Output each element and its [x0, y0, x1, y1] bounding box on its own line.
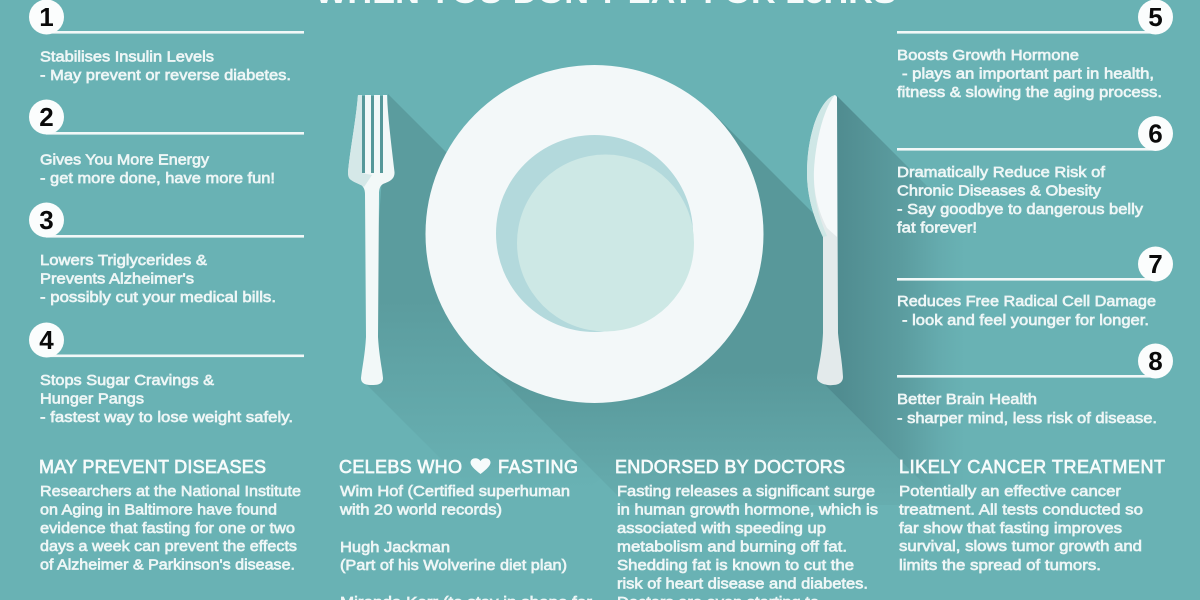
panel: celebs who love fasting: Wim Hof (Certified superhuman	[340, 483, 570, 500]
panel: likely cancer treatment: far show that fasting improves	[899, 520, 1122, 537]
panel: endorsed by doctors: ENDORSED BY DOCTORS	[615, 457, 845, 477]
benefit 2: 2	[39, 102, 54, 132]
panel: likely cancer treatment: treatment. All tests conducted so	[899, 502, 1143, 518]
benefit 7: - look and feel younger for longer.	[902, 312, 1149, 329]
panel: endorsed by doctors: metabolism and burning off fat.	[617, 538, 847, 556]
panel: celebs who love fasting	[339, 457, 592, 600]
icon: plate	[426, 65, 764, 403]
benefit 1	[29, 0, 304, 84]
panel: may prevent diseases: of Alzheimer & Parkinson's disease.	[40, 556, 295, 574]
benefit 4: Hunger Pangs	[40, 390, 144, 408]
icon: knife	[807, 95, 843, 385]
benefit 6: - Say goodbye to dangerous belly	[897, 201, 1144, 218]
panel: likely cancer treatment	[899, 457, 1165, 574]
panel: endorsed by doctors: associated with speeding up	[617, 520, 826, 537]
benefit 7: 7	[1148, 249, 1163, 279]
benefit 5: Boosts Growth Hormone	[897, 47, 1079, 64]
panel: may prevent diseases: on Aging in Baltimore have found	[40, 502, 277, 518]
panel: may prevent diseases: days a week can prevent the effects	[40, 538, 297, 555]
benefit 5: fitness & slowing the aging process.	[897, 84, 1162, 101]
knife long shadow	[825, 96, 1137, 600]
benefit 8	[897, 344, 1173, 427]
benefit 3: - possibly cut your medical bills.	[40, 289, 276, 306]
panel: celebs who love fasting: with 20 world records)	[339, 502, 502, 518]
fork long shadow	[367, 94, 700, 538]
panel: celebs who love fasting: Hugh Jackman	[340, 539, 450, 556]
panel: likely cancer treatment: Potentially an effective cancer	[899, 483, 1121, 500]
panel: may prevent diseases	[39, 457, 301, 574]
benefit 1: Stabilises Insulin Levels	[40, 48, 214, 66]
panel: likely cancer treatment: survival, slows tumor growth and	[899, 538, 1142, 555]
panel: celebs who love fasting: FASTING	[498, 457, 578, 477]
benefit 5: 5	[1148, 2, 1163, 32]
benefit 7	[897, 246, 1173, 329]
benefit 8: Better Brain Health	[897, 391, 1037, 408]
benefit 7: Reduces Free Radical Cell Damage	[897, 293, 1156, 310]
benefit 8: 8	[1148, 346, 1163, 376]
benefit 4: - fastest way to lose weight safely.	[40, 409, 293, 426]
benefit 4: 4	[39, 325, 54, 355]
benefit 3: Lowers Triglycerides &	[40, 252, 207, 269]
panel: endorsed by doctors: Shedding fat is known to cut the	[617, 557, 854, 574]
benefit 4: Stops Sugar Cravings &	[40, 372, 214, 389]
benefit 3: Prevents Alzheimer's	[40, 270, 194, 288]
panel: endorsed by doctors: in human growth hormone, which is	[617, 502, 878, 518]
benefit 6	[897, 116, 1173, 236]
benefit 6: fat forever!	[897, 220, 977, 236]
panel: celebs who love fasting: CELEBS WHO	[339, 457, 462, 477]
benefit 6: Chronic Diseases & Obesity	[897, 182, 1102, 200]
panel: endorsed by doctors: risk of heart disease and diabetes.	[617, 576, 868, 592]
benefit 6: 6	[1148, 118, 1163, 148]
benefit 2: - get more done, have more fun!	[40, 170, 275, 187]
panel: endorsed by doctors	[615, 457, 878, 600]
benefit 8: - sharper mind, less risk of disease.	[897, 410, 1157, 427]
panel: celebs who love fasting: (Part of his Wolverine diet plan)	[340, 557, 567, 574]
panel: may prevent diseases: MAY PREVENT DISEASES	[39, 457, 266, 477]
panel: may prevent diseases: evidence that fasting for one or two	[40, 520, 295, 537]
panel: may prevent diseases: Researchers at the National Institute	[40, 483, 301, 500]
plate long shadow	[475, 114, 945, 505]
benefit 1: 1	[39, 2, 54, 32]
panel: likely cancer treatment: LIKELY CANCER TREATMENT	[899, 457, 1165, 477]
panel: likely cancer treatment: limits the spread of tumors.	[899, 557, 1101, 574]
benefit 2: Gives You More Energy	[40, 152, 210, 168]
icon: fork	[348, 95, 395, 385]
benefit 2	[29, 100, 304, 187]
benefit 3: 3	[39, 205, 54, 235]
benefit 6: Dramatically Reduce Risk of	[897, 164, 1106, 181]
benefit 5	[897, 0, 1173, 101]
benefit 1: - May prevent or reverse diabetes.	[40, 67, 291, 84]
benefit 5: - plays an important part in health,	[902, 66, 1154, 82]
benefit 4	[29, 322, 304, 426]
benefit 3	[29, 202, 304, 306]
panel: endorsed by doctors: Fasting releases a significant surge	[617, 483, 875, 500]
